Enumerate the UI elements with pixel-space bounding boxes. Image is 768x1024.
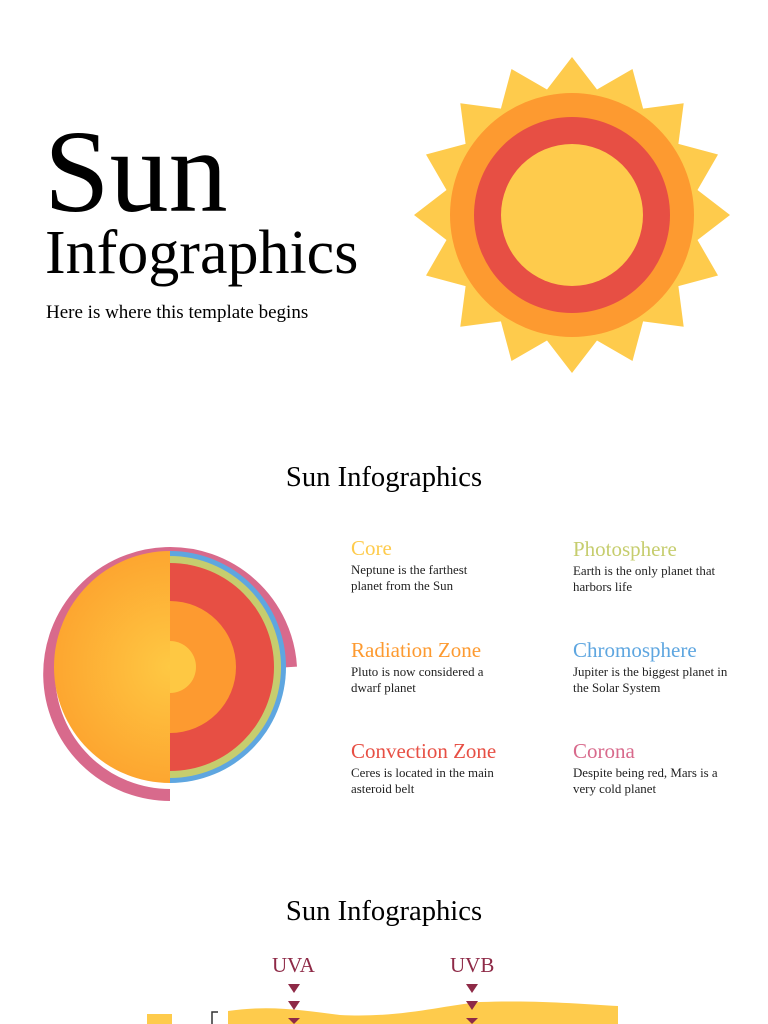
subtitle: Infographics: Infographics [45, 219, 358, 287]
item: Core: Core [351, 536, 392, 560]
item: Corona [573, 739, 718, 796]
heading: section 2: Sun Infographics [286, 462, 482, 493]
item: Photosphere: Photosphere [573, 537, 677, 561]
item: Radiation Zone: Pluto is now considered a [351, 665, 483, 679]
item: Convection Zone: asteroid belt [351, 782, 414, 796]
item: Convection Zone [351, 739, 496, 796]
item: Photosphere: Earth is the only planet that [573, 564, 715, 578]
item: Core [351, 536, 468, 592]
item: Chromosphere: the Solar System [573, 680, 660, 694]
item: Chromosphere: Jupiter is the biggest planet in [573, 665, 727, 679]
item: Corona: Despite being red, Mars is a [573, 766, 718, 780]
chart: sun layers cross-section [43, 547, 297, 801]
item: Core: planet from the Sun [351, 578, 453, 592]
item: Core: Neptune is the farthest [351, 563, 467, 577]
item: Radiation Zone: dwarf planet [351, 680, 416, 694]
item: Convection Zone: Ceres is located in the main [351, 766, 494, 780]
item: Photosphere: harbors life [573, 580, 632, 594]
tagline: Here is where this template begins [46, 302, 308, 323]
item: Chromosphere [573, 638, 728, 694]
chart: UV rays wave [147, 984, 618, 1024]
title: Sun: Sun [44, 106, 228, 237]
item: Photosphere [573, 537, 715, 594]
heading: section 3: Sun Infographics [286, 896, 482, 927]
item: Radiation Zone: Radiation Zone [351, 638, 481, 662]
item: Corona: Corona [573, 739, 635, 763]
label: UVB: UVB [450, 953, 494, 977]
icon: sun [414, 57, 730, 373]
label: UVA: UVA [272, 953, 315, 977]
item: Corona: very cold planet [573, 782, 656, 796]
item: Radiation Zone [351, 638, 484, 694]
item: Chromosphere: Chromosphere [573, 638, 697, 662]
item: Convection Zone: Convection Zone [351, 739, 496, 763]
